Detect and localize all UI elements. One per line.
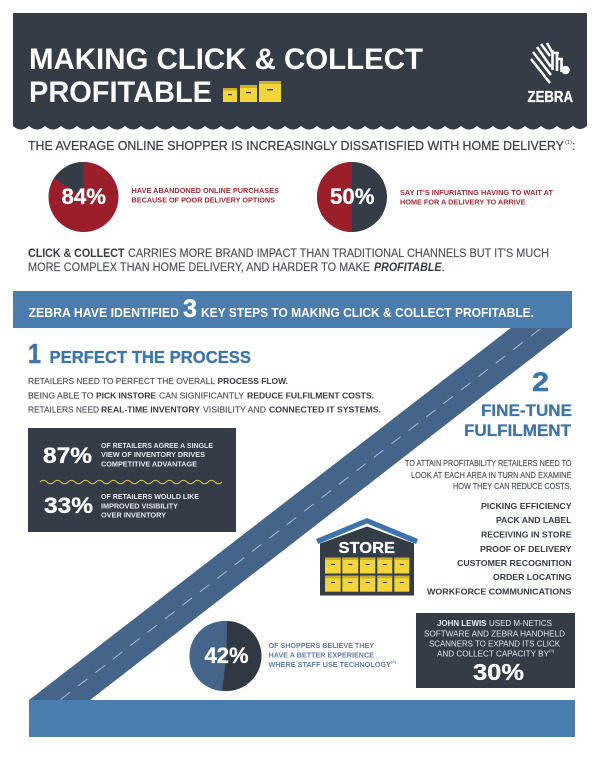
pie chart: 42%	[189, 621, 262, 691]
stat: 33%	[44, 492, 199, 520]
text: better experience: HAVE A BETTER EXPERIENCE	[268, 650, 374, 660]
stat: 33%: OF RETAILERS WOULD LIKE	[101, 492, 199, 501]
text: attain profitability: HOW THEY CAN REDUCE COSTS.	[453, 482, 572, 491]
list: cost areas: PACK AND LABEL	[496, 515, 572, 525]
heading: step 1	[28, 338, 251, 369]
panel: John Lewis callout: JOHN LEWIS	[437, 619, 486, 628]
text: brand impact: MORE COMPLEX THAN HOME DELIVERY, AND HARDER TO MAKE	[28, 262, 370, 274]
list: cost areas: PROOF OF DELIVERY	[480, 544, 572, 554]
list: cost areas: PICKING EFFICIENCY	[481, 501, 572, 511]
subheading: :	[572, 138, 576, 153]
panel: John Lewis callout: (3)	[549, 648, 555, 653]
list: cost areas: ORDER LOCATING	[493, 572, 572, 582]
heading: step 2: FINE-TUNE	[481, 401, 572, 420]
title: MAKING CLICK & COLLECT	[29, 43, 423, 76]
text: process flow	[28, 376, 381, 414]
stat: 33%: 33%	[44, 493, 93, 518]
stat: 33%: OVER INVENTORY	[101, 510, 166, 520]
text: process flow: BEING ABLE TO	[28, 390, 94, 400]
text: process flow: CAN SIGNIFICANTLY	[159, 390, 244, 400]
text: infuriating wait: SAY IT'S INFURIATING HAVING TO WAIT AT	[400, 188, 553, 197]
stat: 33%: IMPROVED VISIBILITY	[101, 502, 178, 510]
footer band	[29, 700, 575, 737]
banner: key steps	[13, 291, 572, 328]
panel: inventory stats	[28, 428, 236, 532]
icon: store	[316, 518, 418, 596]
panel: John Lewis callout: SOFTWARE AND ZEBRA HANDHELD	[424, 630, 565, 638]
banner: key steps: 3	[183, 295, 197, 323]
text: brand impact	[28, 248, 549, 274]
text: process flow: RETAILERS NEED	[28, 404, 99, 414]
text: brand impact: PROFITABLE	[374, 262, 442, 274]
icon: store: STORE	[338, 540, 395, 557]
heading: step 2: FULFILMENT	[464, 421, 572, 440]
text: better experience: (2)	[391, 659, 397, 664]
pie chart: 42%: 42%	[204, 643, 248, 668]
icon: yellow boxes	[223, 81, 281, 102]
logo: Zebra	[528, 43, 573, 106]
text: abandoned purchases	[132, 186, 279, 204]
stat: 87%: 87%	[43, 443, 92, 468]
panel: John Lewis callout: SCANNERS TO EXPAND ITS CLICK	[429, 640, 561, 648]
text: abandoned purchases: HAVE ABANDONED ONLINE PURCHASES	[132, 186, 279, 195]
logo: Zebra: ZEBRA	[528, 89, 573, 106]
text: process flow: PICK INSTORE	[96, 390, 156, 400]
title	[29, 43, 423, 109]
text: abandoned purchases: BECAUSE OF POOR DELIVERY OPTIONS	[132, 196, 275, 204]
stat: 87%: COMPETITIVE ADVANTAGE	[101, 460, 197, 468]
pie chart: 50%	[317, 162, 387, 232]
list: cost areas: RECEIVING IN STORE	[481, 530, 572, 540]
list: cost areas	[427, 501, 572, 596]
stat: 87%: VIEW OF INVENTORY DRIVES	[101, 450, 205, 459]
pie chart: 84%	[48, 162, 118, 232]
header panel	[13, 13, 587, 130]
heading: step 1: PERFECT THE PROCESS	[50, 347, 251, 367]
title: PROFITABLE	[29, 76, 212, 109]
text: better experience: WHERE STAFF USE TECHNOLOGY	[268, 660, 391, 669]
panel: John Lewis callout: USED M-NETICS	[489, 619, 552, 628]
stat: 87%: OF RETAILERS AGREE A SINGLE	[101, 441, 213, 450]
text: brand impact: CLICK & COLLECT	[28, 248, 124, 260]
text: process flow: VISIBILITY AND	[203, 404, 266, 414]
banner: key steps: KEY STEPS TO MAKING CLICK & COLLECT PROFITABLE.	[201, 306, 534, 320]
heading: step 2: 2	[532, 367, 549, 397]
road	[29, 328, 571, 700]
pie chart: 84%: 84%	[62, 184, 106, 209]
list: cost areas: WORKFORCE COMMUNICATIONS	[427, 586, 572, 596]
text: better experience	[268, 641, 397, 669]
text: attain profitability: LOOK AT EACH AREA IN TURN AND EXAMINE	[411, 471, 572, 480]
stat: 87%	[43, 441, 213, 468]
text: process flow: CONNECTED IT SYSTEMS.	[269, 404, 381, 414]
panel: John Lewis callout: AND COLLECT CAPACITY BY	[437, 650, 550, 658]
list: cost areas: CUSTOMER RECOGNITION	[457, 558, 572, 568]
subheading: (1)	[565, 140, 572, 146]
text: infuriating wait: HOME FOR A DELIVERY TO ARRIVE	[400, 198, 526, 206]
heading: step 2	[464, 367, 572, 440]
text: better experience: OF SHOPPERS BELIEVE THEY	[268, 641, 374, 650]
panel: John Lewis callout: 30%	[473, 659, 524, 685]
heading: step 1: 1	[28, 338, 41, 369]
subheading: THE AVERAGE ONLINE SHOPPER IS INCREASINGLY DISSATISFIED WITH HOME DELIVERY	[28, 138, 564, 153]
text: process flow: RETAILERS NEED TO PERFECT THE OVERALL	[28, 376, 215, 386]
text: attain profitability	[405, 459, 572, 491]
text: attain profitability: TO ATTAIN PROFITABILITY RETAILERS NEED TO	[405, 459, 572, 468]
text: process flow: REAL-TIME INVENTORY	[101, 404, 200, 414]
text: brand impact: CARRIES MORE BRAND IMPACT THAN TRADITIONAL CHANNELS BUT IT'S MUCH	[128, 248, 549, 260]
text: process flow: PROCESS FLOW.	[218, 376, 288, 386]
pie chart: 50%: 50%	[330, 184, 374, 209]
banner: key steps: ZEBRA HAVE IDENTIFIED	[28, 306, 179, 320]
text: process flow: REDUCE FULFILMENT COSTS.	[247, 390, 374, 400]
text: infuriating wait	[400, 188, 553, 206]
panel: John Lewis callout	[416, 613, 575, 688]
text: brand impact: .	[442, 262, 445, 274]
